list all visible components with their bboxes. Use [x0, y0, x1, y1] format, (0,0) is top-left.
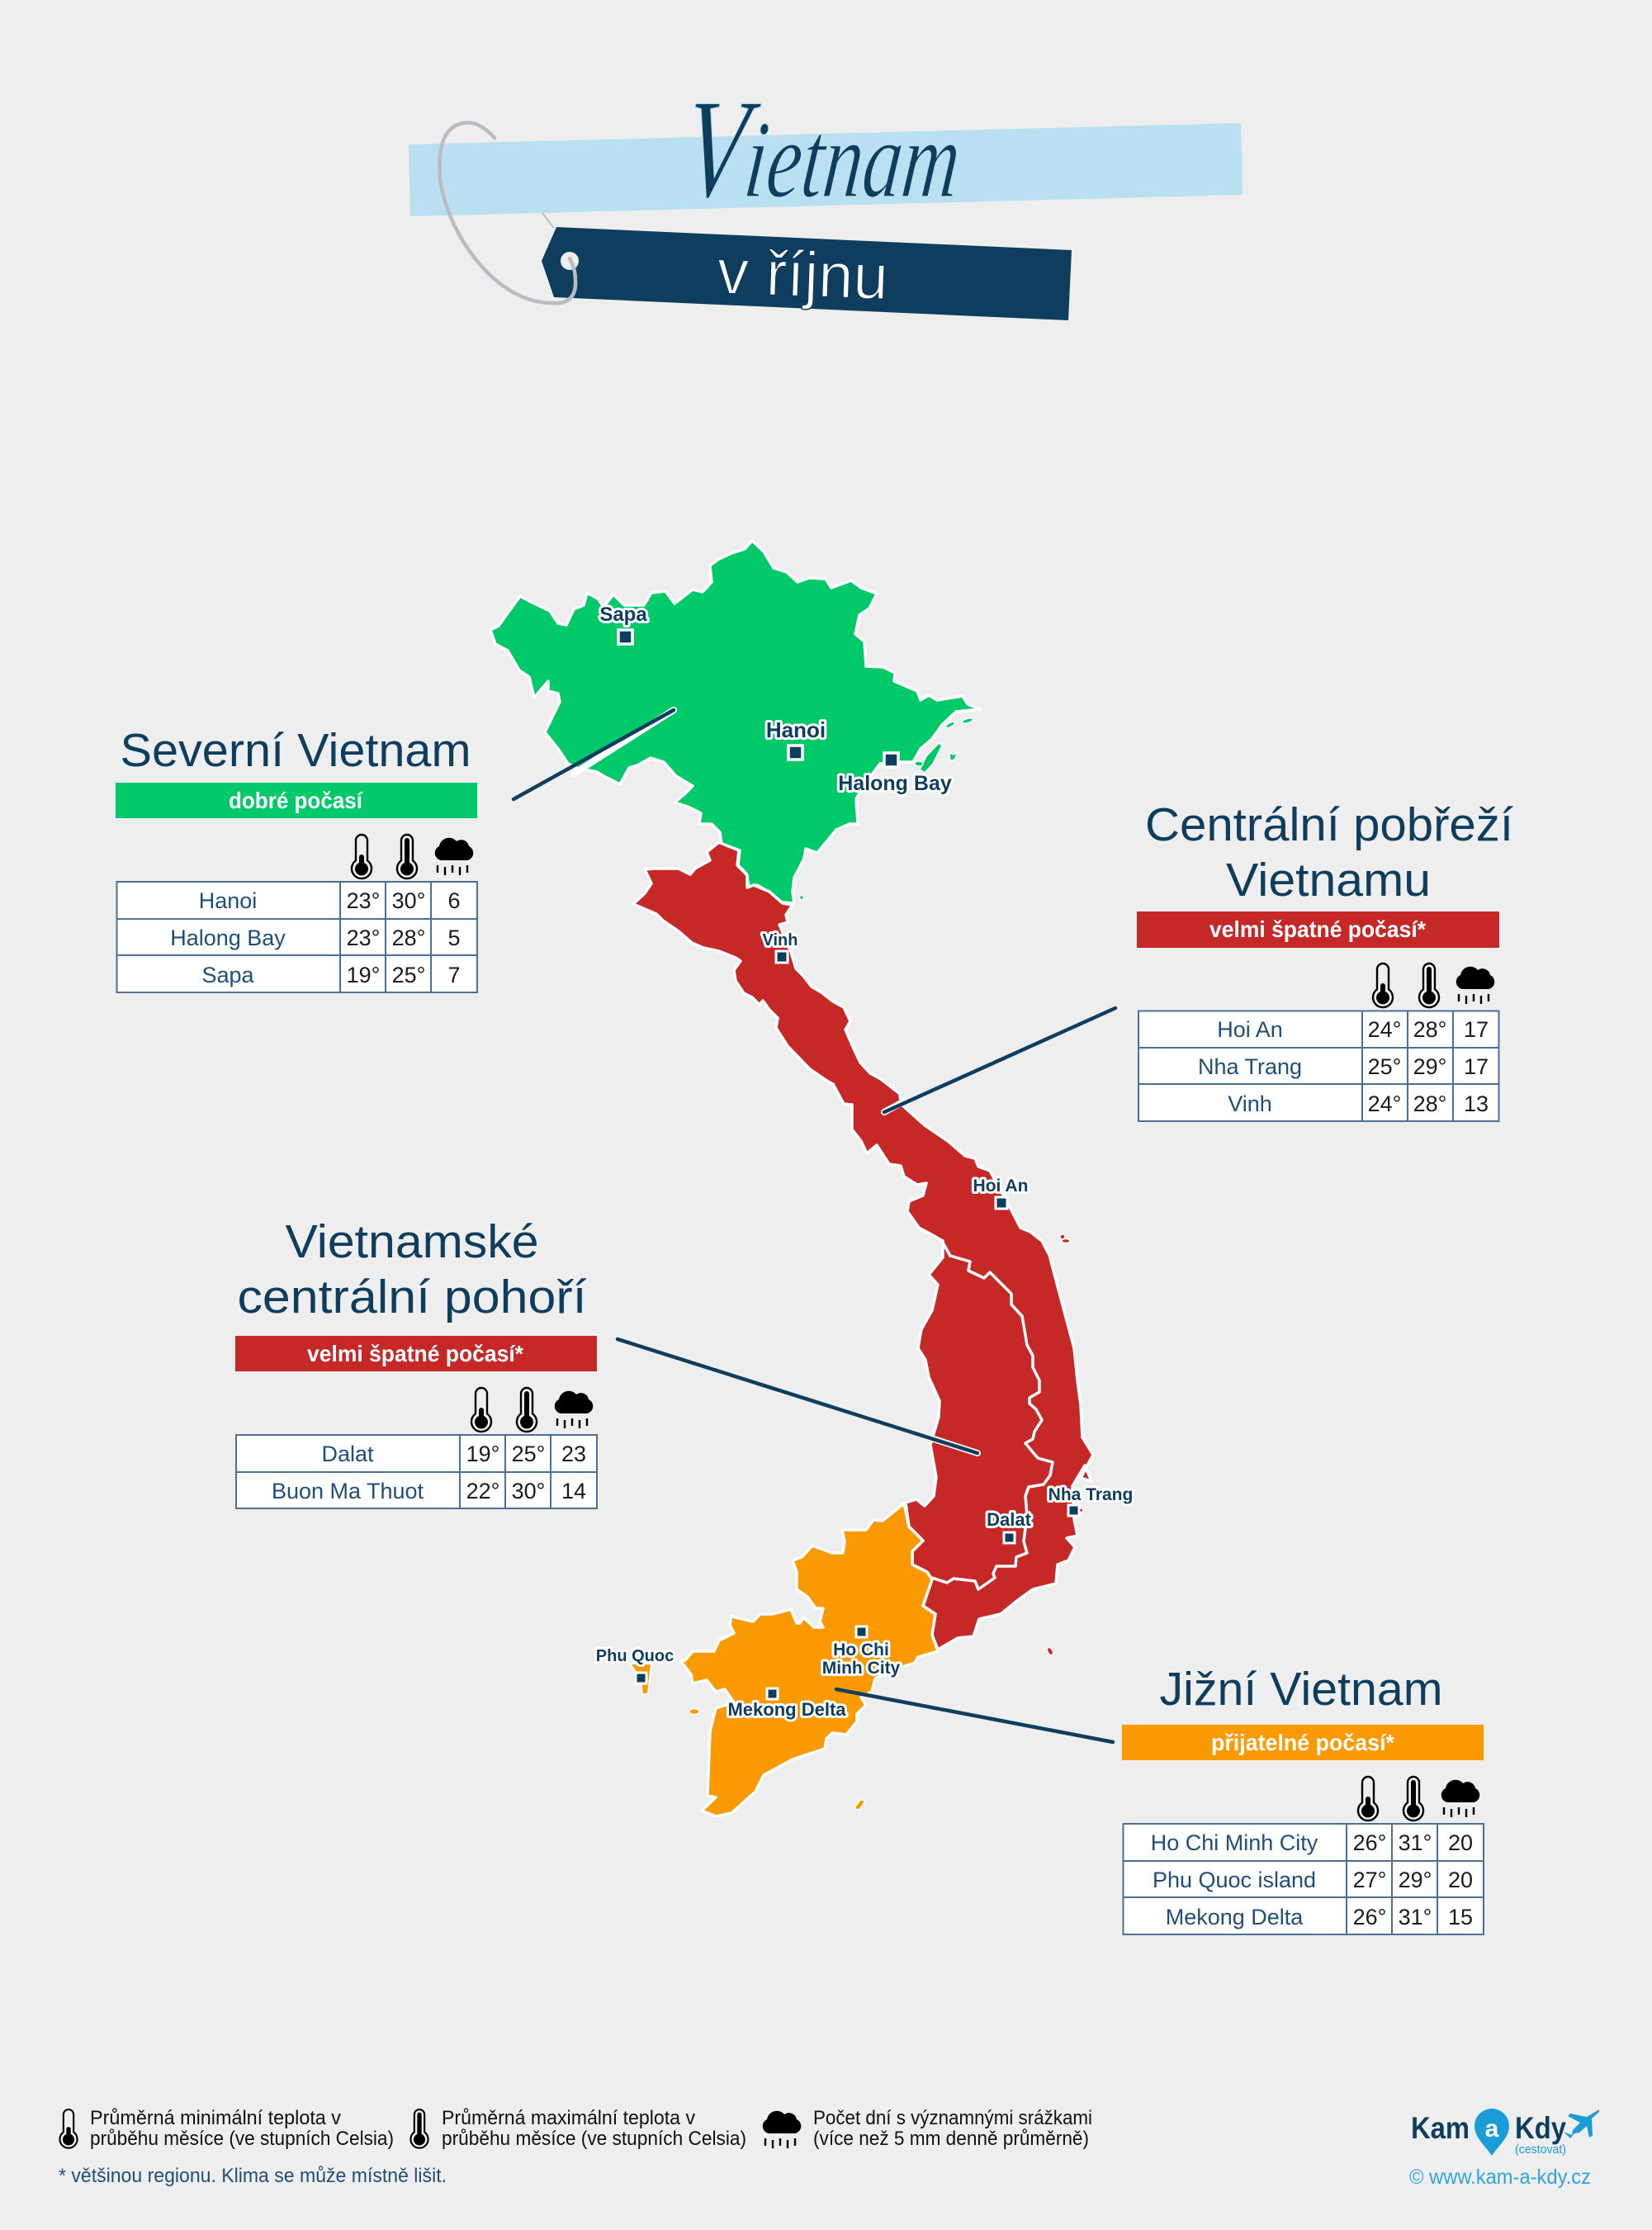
table: south: 15 [1448, 1905, 1473, 1929]
heading: Vietnamské centrální pohoří: centrální pohoří [238, 1271, 587, 1323]
city: Ho Chi Minh City: Ho Chi [833, 1641, 889, 1659]
weather bar: acceptable [1122, 1725, 1484, 1760]
table: highlands: 14 [561, 1479, 586, 1503]
table: central coast: 13 [1464, 1091, 1489, 1116]
table: south: 27° [1353, 1868, 1386, 1892]
heading: Centrální pobřeží Vietnamu: Centrální pobřeží [1145, 798, 1513, 851]
title: Vietnam: Vietnam [677, 70, 969, 228]
city: Sapa: Sapa [599, 604, 647, 626]
logo: Kam a Kdy [1411, 2109, 1599, 2157]
weather bar: very bad: velmi špatné počasí* [1209, 916, 1426, 942]
table: south: 20 [1448, 1830, 1473, 1855]
table: north [116, 882, 477, 992]
logo: Kam a Kdy: Kam [1411, 2111, 1470, 2145]
table: central coast: Vinh [1228, 1091, 1272, 1116]
subtitle tag: v říjnu [716, 236, 889, 313]
panel: Severní Vietnam [116, 724, 477, 992]
legend: minimum temperature: průběhu měsíce (ve stupních Celsia) [90, 2128, 394, 2150]
table: central coast: 29° [1413, 1054, 1446, 1079]
table: north: 5 [447, 926, 461, 950]
icon: plane [1564, 2109, 1599, 2138]
table: north: 28° [392, 926, 425, 950]
table: south: 29° [1399, 1868, 1432, 1892]
weather bar: acceptable: přijatelné počasí* [1211, 1730, 1394, 1755]
legend: minimum temperature: Průměrná minimální teplota v [90, 2107, 341, 2129]
city: Mekong Delta: Mekong Delta [727, 1699, 846, 1720]
panel: Centrální pobřeží Vietnamu [1137, 798, 1513, 1121]
table: highlands: 19° [466, 1442, 499, 1466]
table: central coast: Hoi An [1217, 1017, 1283, 1042]
table: central coast: 17 [1464, 1054, 1489, 1079]
heading: Centrální pobřeží Vietnamu: Vietnamu [1226, 854, 1431, 907]
table: central coast [1138, 1011, 1499, 1121]
city: Hoi An: Hoi An [973, 1177, 1028, 1195]
table: south: 20 [1448, 1868, 1473, 1892]
city: Nha Trang [1048, 1485, 1133, 1516]
icons: table header [471, 1388, 593, 1432]
heading: Jižní Vietnam: Jižní Vietnam [1159, 1663, 1443, 1716]
title banner: light blue ribbon [409, 123, 1243, 216]
region: south (orange) [630, 1503, 938, 1816]
table: south: Phu Quoc island [1153, 1868, 1316, 1892]
legend: maximum temperature [410, 2107, 746, 2150]
region: central coast and highlands (red) [633, 842, 1093, 1656]
city: Ho Chi Minh City: Minh City [822, 1659, 901, 1678]
city: Dalat [987, 1509, 1032, 1543]
legend: rainy days: (více než 5 mm denně průměrně) [813, 2128, 1089, 2150]
table: south: 26° [1353, 1905, 1386, 1929]
region: north (green) [490, 541, 981, 903]
city: Hanoi [766, 717, 826, 760]
table: south: 26° [1353, 1830, 1386, 1855]
table: north: Halong Bay [170, 926, 286, 950]
table: north: Hanoi [199, 888, 257, 913]
legend: maximum temperature: Průměrná maximální teplota v [442, 2107, 695, 2129]
city: Nha Trang: Nha Trang [1048, 1485, 1133, 1504]
weather bar: very bad: velmi špatné počasí* [307, 1341, 523, 1366]
table: north: 23° [347, 926, 380, 950]
table: north: 6 [447, 888, 461, 913]
table: north: Sapa [201, 963, 255, 987]
table: highlands: 25° [512, 1442, 545, 1466]
leader line: central coast [884, 1008, 1115, 1112]
city: Phu Quoc [596, 1647, 674, 1683]
heading: Centrální pobřeží Vietnamu [1145, 798, 1513, 907]
legend: rainy days: Počet dní s významnými srážkami [813, 2107, 1092, 2129]
logo: Kam a Kdy: Kdy [1515, 2111, 1566, 2145]
table: south [1123, 1824, 1484, 1934]
footnote: * většinou regionu. Klima se může místně lišit. [59, 2165, 447, 2187]
tag string loop [439, 123, 575, 303]
city: Dalat: Dalat [987, 1509, 1032, 1530]
weather bar: very bad [1137, 911, 1499, 948]
icons: table header [352, 835, 473, 878]
logo: Kam a Kdy: (cestovat) [1515, 2142, 1566, 2157]
city: Mekong Delta [727, 1688, 846, 1720]
city: Phu Quoc: Phu Quoc [596, 1647, 674, 1665]
leader line: north [514, 710, 674, 799]
panel: Vietnamské centrální pohoří [235, 1215, 597, 1508]
city: Hanoi: Hanoi [766, 717, 826, 742]
heading: Vietnamské centrální pohoří [238, 1215, 587, 1323]
table: highlands: 23 [561, 1442, 586, 1466]
heading: Vietnamské centrální pohoří: Vietnamské [286, 1215, 538, 1268]
table: north: 23° [347, 888, 380, 913]
icons: table header [1358, 1777, 1479, 1820]
table: highlands: 22° [466, 1479, 499, 1503]
weather bar: good [116, 783, 477, 818]
table: central coast: 28° [1413, 1017, 1446, 1042]
table: highlands: Buon Ma Thuot [272, 1479, 424, 1503]
table: north: 30° [392, 888, 425, 913]
table: highlands [236, 1435, 597, 1508]
table: central coast: 28° [1413, 1091, 1446, 1116]
city: Hoi An [973, 1177, 1028, 1209]
table: north: 7 [447, 963, 461, 987]
table: highlands: 30° [512, 1479, 545, 1503]
subtitle tag [542, 227, 1072, 320]
icons: table header [1373, 963, 1494, 1007]
region border: highlands [932, 1243, 1053, 1589]
weather bar: good: dobré počasí [229, 788, 363, 813]
table: central coast: 17 [1464, 1017, 1489, 1042]
legend: rainy days [763, 2107, 1092, 2150]
table: north: 25° [392, 963, 425, 987]
city: Sapa [599, 604, 647, 644]
table: north: 19° [347, 963, 380, 987]
table: south: 31° [1399, 1830, 1432, 1855]
legend: minimum temperature [59, 2107, 394, 2150]
table: central coast: Nha Trang [1198, 1054, 1302, 1079]
map of Vietnam [490, 541, 1093, 1816]
heading: Severní Vietnam: Severní Vietnam [121, 724, 471, 777]
table: south: Ho Chi Minh City [1151, 1830, 1318, 1855]
city: Vinh [763, 931, 798, 963]
leader line: highlands [618, 1339, 977, 1453]
city: Halong Bay: Halong Bay [838, 772, 952, 795]
legend: maximum temperature: průběhu měsíce (ve stupních Celsia) [442, 2128, 746, 2150]
panel: Jižní Vietnam [1122, 1663, 1484, 1934]
city: Ho Chi Minh City [822, 1626, 901, 1678]
city: Halong Bay [838, 753, 952, 795]
leader line: south [836, 1689, 1113, 1742]
table: south: Mekong Delta [1166, 1905, 1304, 1929]
table: south: 31° [1399, 1905, 1432, 1929]
table: highlands: Dalat [321, 1442, 374, 1466]
table: central coast: 24° [1368, 1017, 1401, 1042]
weather bar: very bad [235, 1336, 597, 1371]
table: central coast: 25° [1368, 1054, 1401, 1079]
table: central coast: 24° [1368, 1091, 1401, 1116]
website credit: © www.kam-a-kdy.cz [1409, 2166, 1591, 2189]
city: Vinh: Vinh [763, 931, 798, 949]
logo: Kam a Kdy: a [1485, 2115, 1499, 2142]
